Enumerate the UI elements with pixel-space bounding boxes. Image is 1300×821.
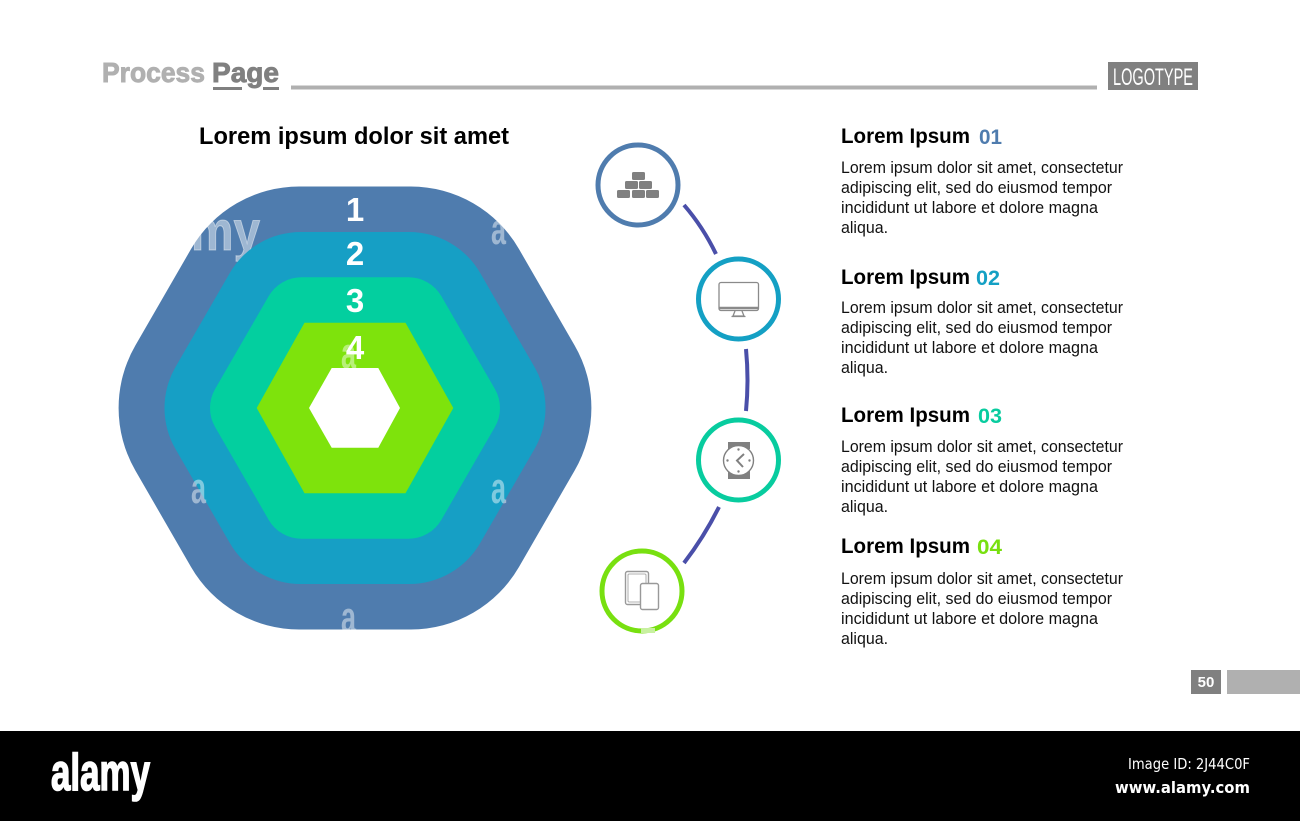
text block 02: adipiscing elit, sed do eiusmod tempor xyxy=(841,319,1112,337)
text block 03: Lorem Ipsum xyxy=(841,404,970,427)
text block 04 xyxy=(841,535,1123,648)
text block 01 xyxy=(841,125,1123,237)
text block 04: Lorem Ipsum xyxy=(841,535,970,558)
header: process page title xyxy=(102,57,279,90)
watermark fragments xyxy=(191,205,506,642)
layer numbers: 4 xyxy=(346,329,365,366)
text block 01: incididunt ut labore et dolore magna xyxy=(841,199,1099,217)
text block 04: aliqua. xyxy=(841,630,888,648)
text block 04: adipiscing elit, sed do eiusmod tempor xyxy=(841,590,1112,608)
step 1 circle: gold bars icon xyxy=(598,145,678,225)
text block 04: 04 xyxy=(977,536,1002,559)
step 4 circle: tablets icon xyxy=(602,551,682,633)
text block 03: aliqua. xyxy=(841,498,888,516)
text block 03: 03 xyxy=(978,405,1002,428)
text block 03 xyxy=(841,404,1123,516)
text block 03: Lorem ipsum dolor sit amet, consectetur xyxy=(841,438,1123,456)
layer 2 hexagon xyxy=(246,314,464,502)
page number badge: 50 xyxy=(1198,674,1214,691)
text block 04: Lorem ipsum dolor sit amet, consectetur xyxy=(841,570,1123,588)
watermark fragments: a xyxy=(341,329,356,378)
layer numbers: 2 xyxy=(346,235,364,272)
text block 02: aliqua. xyxy=(841,359,888,377)
text block 01: aliqua. xyxy=(841,219,888,237)
logotype badge xyxy=(1108,62,1198,91)
alamy wordmark: alamy xyxy=(51,744,150,802)
header: process page title: Page xyxy=(212,57,279,88)
image id: Image ID: 2J44C0F xyxy=(1128,755,1250,773)
text block 02 xyxy=(841,266,1123,377)
page number bar xyxy=(1227,670,1300,694)
layer 3 hexagon xyxy=(248,315,462,501)
watermark fragments: a xyxy=(341,593,356,642)
text block 03: adipiscing elit, sed do eiusmod tempor xyxy=(841,458,1112,476)
nested hexagon chart xyxy=(191,191,506,642)
text block 02: incididunt ut labore et dolore magna xyxy=(841,339,1099,357)
site url: www.alamy.com xyxy=(1115,778,1250,797)
header rule xyxy=(291,86,1097,90)
text block 01: Lorem ipsum dolor sit amet, consectetur xyxy=(841,159,1123,177)
chart heading: Lorem ipsum dolor sit amet xyxy=(199,123,509,150)
text block 01: adipiscing elit, sed do eiusmod tempor xyxy=(841,179,1112,197)
text block 02: Lorem ipsum dolor sit amet, consectetur xyxy=(841,299,1123,317)
page number badge xyxy=(1191,670,1221,694)
layer 4 hexagon xyxy=(257,323,453,493)
logotype badge: LOGOTYPE xyxy=(1113,64,1193,91)
layer numbers: 3 xyxy=(346,282,364,319)
step 3 circle: watch icon xyxy=(698,420,778,500)
text block 02: Lorem Ipsum xyxy=(841,266,970,289)
centre white hexagon xyxy=(309,368,400,448)
footer band xyxy=(0,731,1300,821)
watermark fragments: a xyxy=(191,464,206,513)
connector arcs xyxy=(684,205,748,563)
layer numbers xyxy=(346,191,365,366)
watermark fragments: a xyxy=(491,205,506,254)
watermark fragments: a xyxy=(491,464,506,513)
header: process page title: Process xyxy=(102,57,205,88)
watermark fragment on layer 1: my xyxy=(191,199,260,262)
text block 01: 01 xyxy=(979,126,1002,149)
text block 01: Lorem Ipsum xyxy=(841,125,970,148)
text block 02: 02 xyxy=(976,267,1000,290)
step 2 circle: monitor icon xyxy=(698,259,778,339)
text block 04: incididunt ut labore et dolore magna xyxy=(841,610,1099,628)
text block 03: incididunt ut labore et dolore magna xyxy=(841,478,1099,496)
layer 1 hexagon xyxy=(244,312,466,504)
layer numbers: 1 xyxy=(346,191,364,228)
